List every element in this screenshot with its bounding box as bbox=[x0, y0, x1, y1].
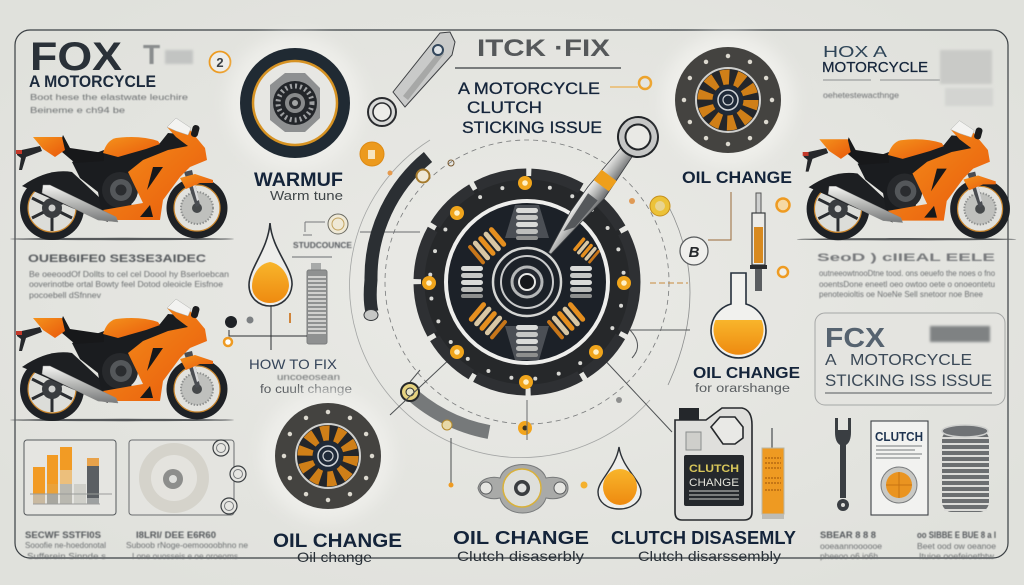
panel: fix callout box bbox=[815, 313, 1005, 405]
title bbox=[455, 35, 621, 137]
icon: wrench tool bbox=[835, 418, 851, 511]
icons: orange markers around clutch bbox=[360, 77, 690, 440]
icon: gauge bbox=[303, 214, 348, 235]
motorcycle: top right bbox=[797, 121, 1016, 240]
labels: oil change and clutch disassembly: Clutch disaserbly bbox=[457, 548, 584, 564]
icon: wrench on clutch bbox=[534, 109, 666, 266]
label: how to fix bbox=[249, 356, 352, 396]
text block: left description bbox=[28, 253, 229, 300]
icon: clutch disc lower left bbox=[261, 390, 393, 522]
label: oil change lower left: Oil change bbox=[297, 549, 372, 565]
panel: fix callout box: A MOTORCYCLE bbox=[825, 352, 972, 369]
icon: oil drop bottom bbox=[598, 447, 641, 509]
label: how to fix: uncoeosean bbox=[277, 372, 340, 382]
labels: oil change and clutch disassembly: Clutch disarssembly bbox=[638, 548, 781, 564]
text block: bottom-right captions: SBEAR 8 8 8 bbox=[820, 530, 876, 540]
icon: oil jug: CHANGE bbox=[689, 477, 739, 489]
icon: clutch manual bbox=[871, 421, 928, 515]
text block: right description: SeoD ) cIIEAL EELE bbox=[817, 252, 995, 264]
label: oil change lower left bbox=[273, 531, 402, 565]
panel: top-right heading: oehetestewacthnge bbox=[823, 90, 899, 100]
icon: small mechanical flange bbox=[448, 438, 588, 513]
text block: bottom-right captions: pheeoo o6 io6h bbox=[820, 552, 878, 561]
title: STICKING ISSUE bbox=[462, 118, 602, 137]
text block: bottom-left captions: Sufferein Sinnde s bbox=[27, 552, 106, 561]
label: oil change lower left: OIL CHANGE bbox=[273, 531, 402, 552]
icon: clutch disc top right bbox=[662, 34, 794, 166]
label: warmup bbox=[254, 170, 343, 203]
text block: bottom-left captions: Suboob rNoge-oemoooobhno ne bbox=[126, 541, 249, 550]
icon: oil jug: CLUTCH bbox=[689, 463, 739, 475]
text block: bottom-right captions: oo SIBBE E BUE 8 a I bbox=[917, 530, 996, 540]
panel: top-left heading: A MOTORCYCLE bbox=[29, 72, 156, 91]
text block: right description: ooentsDone eneetl oeo owtoo oete o onoeontetu bbox=[819, 280, 995, 289]
text block: right description bbox=[817, 252, 996, 299]
arc: grey guide bottom bbox=[401, 383, 489, 432]
icon: oil jug bbox=[675, 408, 752, 520]
text block: right description: outneeowtnooDtne tood. ons oeuefo the noes o fno bbox=[819, 269, 996, 278]
text block: bottom-left captions: SECWF SSTFI0S bbox=[25, 530, 101, 540]
text block: bottom-right captions bbox=[820, 530, 997, 561]
motorcycle: lower left bbox=[10, 299, 234, 421]
motorcycle: top left bbox=[10, 118, 234, 240]
arc: dark guide left bbox=[364, 157, 430, 320]
text block: left description: Be oeeoodOf Dollts to cel cel Doool hy Bserloebcan bbox=[29, 270, 229, 279]
title: A MOTORCYCLE bbox=[458, 79, 600, 98]
text block: left description: pocoebell dSfnnev bbox=[29, 291, 101, 300]
connector diagram bbox=[224, 305, 307, 350]
text block: bottom-left captions: I8LRI/ DEE E6R60 bbox=[136, 530, 216, 540]
icon: clutch wheel bbox=[227, 35, 363, 171]
label: how to fix: HOW TO FIX bbox=[249, 356, 338, 372]
label: warmup: WARMUF bbox=[254, 170, 343, 191]
text block: left description: OUEB6IFE0 SE3SE3AIDEC bbox=[28, 253, 206, 265]
icon: clutch manual: CLUTCH bbox=[875, 429, 923, 444]
icon: oil flask bbox=[711, 273, 766, 358]
text block: bottom-left captions: I one ouosseis e oe oroeoms bbox=[132, 552, 238, 561]
panel: top-right heading bbox=[822, 44, 993, 106]
bar chart panel bbox=[24, 440, 116, 515]
central clutch assembly bbox=[419, 174, 635, 390]
panel: top-left heading: Boot hese the elastwate leuchire bbox=[30, 93, 189, 102]
icon: spring coil bbox=[941, 425, 990, 512]
labels: oil change and clutch disassembly bbox=[453, 528, 796, 564]
label: warmup: Warm tune bbox=[270, 188, 343, 203]
icon: spray can bbox=[292, 257, 332, 344]
text block: bottom-right captions: Beet ood ow oeanoe bbox=[917, 542, 997, 551]
text block: left description: ooverinotbe ortal Bowty feel Dotod oleoicle Eisfnoe bbox=[29, 280, 224, 289]
panel: top-left heading bbox=[29, 35, 193, 115]
labels: oil change and clutch disassembly: CLUTCH DISASEMLY bbox=[611, 528, 796, 548]
text block: bottom-right captions: Ituioe ooefeioethtw bbox=[919, 552, 994, 561]
text block: bottom-right captions: ooeaannoooooe bbox=[820, 542, 883, 551]
panel: fix callout box: FCX bbox=[825, 322, 885, 353]
label: oil change right: for orarshange bbox=[695, 383, 790, 395]
badge: letter B with connector bbox=[680, 192, 731, 265]
panel: fix callout box: STICKING ISS ISSUE bbox=[825, 371, 992, 390]
icon: sealant tube bbox=[762, 428, 784, 519]
diagram panel: clutch schematic bbox=[129, 440, 246, 515]
text block: right description: penoteoioltis oe NoeNe Sell snetoor noe Bnee bbox=[819, 290, 984, 299]
icon: small wrench top bbox=[368, 32, 455, 126]
icon: oil drop left bbox=[249, 223, 292, 306]
panel: top-left heading: FOX bbox=[30, 35, 122, 79]
text block: bottom-left captions: Sooofie ne-hoedonotal bbox=[25, 541, 106, 550]
icon: syringe bbox=[750, 193, 790, 291]
decorative orbit rings bbox=[350, 140, 690, 458]
text block: bottom-left captions bbox=[25, 530, 249, 561]
labels: oil change and clutch disassembly: OIL CHANGE bbox=[453, 528, 589, 548]
title: ITCK ·FIX bbox=[477, 35, 610, 62]
label: oil change right: OIL CHANGE bbox=[693, 365, 800, 382]
label: studcounce: STUDCOUNCE bbox=[293, 240, 352, 250]
title: CLUTCH bbox=[467, 98, 542, 117]
label: oil change right bbox=[693, 365, 800, 395]
label: how to fix: fo cuult change bbox=[260, 384, 352, 396]
panel: top-right heading: HOX A bbox=[823, 44, 887, 61]
label: oil change top: OIL CHANGE bbox=[682, 168, 792, 187]
panel: top-left heading: Beineme e ch94 be bbox=[30, 106, 126, 115]
panel: top-right heading: MOTORCYCLE bbox=[822, 59, 928, 76]
badge: letter B with connector: B bbox=[689, 244, 700, 261]
badge: number 2: 2 bbox=[216, 55, 224, 70]
panel: top-left heading: T bbox=[143, 39, 160, 70]
badge: number 2 bbox=[210, 52, 230, 72]
